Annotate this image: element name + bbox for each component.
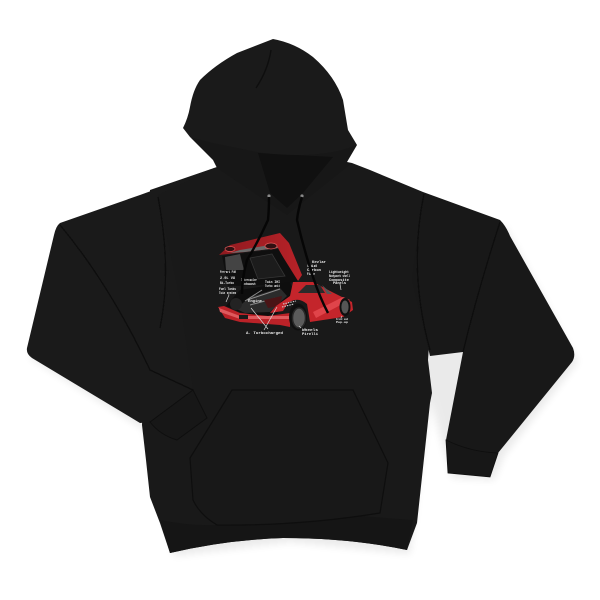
- left sleeve: [27, 167, 217, 423]
- annotation: engine: Turbo unit: [265, 284, 280, 289]
- annotation: bottom: Wheels: [302, 328, 318, 333]
- hood: [183, 39, 357, 215]
- hood centre seam: [256, 50, 271, 88]
- eyelet: left: [267, 194, 271, 198]
- lid taillight: right: [265, 243, 277, 249]
- hoodie body and sleeves: [27, 163, 574, 553]
- annotation: engine: [241, 278, 280, 304]
- engine bay: [226, 282, 296, 318]
- kangaroo pocket: [190, 390, 388, 525]
- annotation: right: Bodywork shell: [329, 274, 351, 279]
- rear wheel: [289, 304, 307, 330]
- annotation: engine: Engine: [248, 299, 262, 304]
- right cuff: [446, 440, 498, 477]
- annotation: upper left: Fuel Tanks: [219, 287, 236, 292]
- checker vent: [282, 301, 296, 307]
- drawstrings: [242, 197, 328, 313]
- raised engine lid: [219, 233, 302, 281]
- inner neck: [258, 153, 333, 208]
- annotation: bottom: A. Turbocharged: [246, 331, 284, 336]
- neck opening and collar: [190, 137, 357, 215]
- front wheel: [340, 298, 350, 316]
- annotation: engine: Exhaust: [242, 282, 256, 287]
- car body rear and side: [270, 282, 353, 322]
- annotation: right: Panels: [333, 281, 346, 286]
- annotation: engine: Intercooler: [241, 278, 257, 283]
- rear bumper: [218, 306, 290, 327]
- annotation: top centre: Kevlar: [312, 260, 326, 265]
- engine: [230, 288, 287, 313]
- side window: [298, 285, 325, 293]
- soft drop shadow: [30, 226, 578, 556]
- annotation: engine: Twin IHI: [265, 280, 280, 285]
- torso: [142, 163, 432, 553]
- left cuff: [150, 390, 207, 440]
- drawstring: left: [242, 197, 269, 294]
- annotation: top centre: Lid: [307, 264, 317, 269]
- eyelet: right: [300, 194, 304, 198]
- car graphic: [218, 233, 353, 337]
- annotation: right: [329, 270, 351, 286]
- annotation: bottom: Pop-up: [336, 321, 348, 324]
- annotation: right: Composite: [329, 278, 350, 283]
- lid grey vent band: [230, 244, 278, 253]
- annotation: bottom: Pirelli: [302, 332, 318, 337]
- annotation: upper left: Bi-Turbo: [220, 281, 234, 286]
- annotation: upper left: Ferrari F40: [220, 270, 236, 275]
- annotation: upper left: 2.9L V8: [220, 277, 236, 281]
- annotation: top centre: Carbon: [307, 268, 321, 273]
- lid taillight: left: [225, 246, 235, 252]
- drawstring: right: [297, 197, 328, 313]
- annotation: right: Lightweight: [329, 270, 349, 275]
- annotation: upper left: Twin system: [219, 291, 236, 296]
- body side highlight: [313, 297, 350, 318]
- hem band: [160, 515, 413, 553]
- annotation: top centre: [307, 260, 326, 277]
- annotation: upper left: [219, 270, 236, 296]
- hood outer: [183, 39, 357, 155]
- annotation: top centre: Fibre: [307, 272, 315, 277]
- rear plate: [239, 315, 248, 319]
- leader lines: [226, 284, 342, 330]
- annotation: bottom: [246, 317, 348, 337]
- sleeve seams: [60, 194, 500, 390]
- right sleeve: [412, 192, 574, 453]
- lid underside: [222, 249, 298, 286]
- annotation: bottom: Front end: [336, 317, 348, 321]
